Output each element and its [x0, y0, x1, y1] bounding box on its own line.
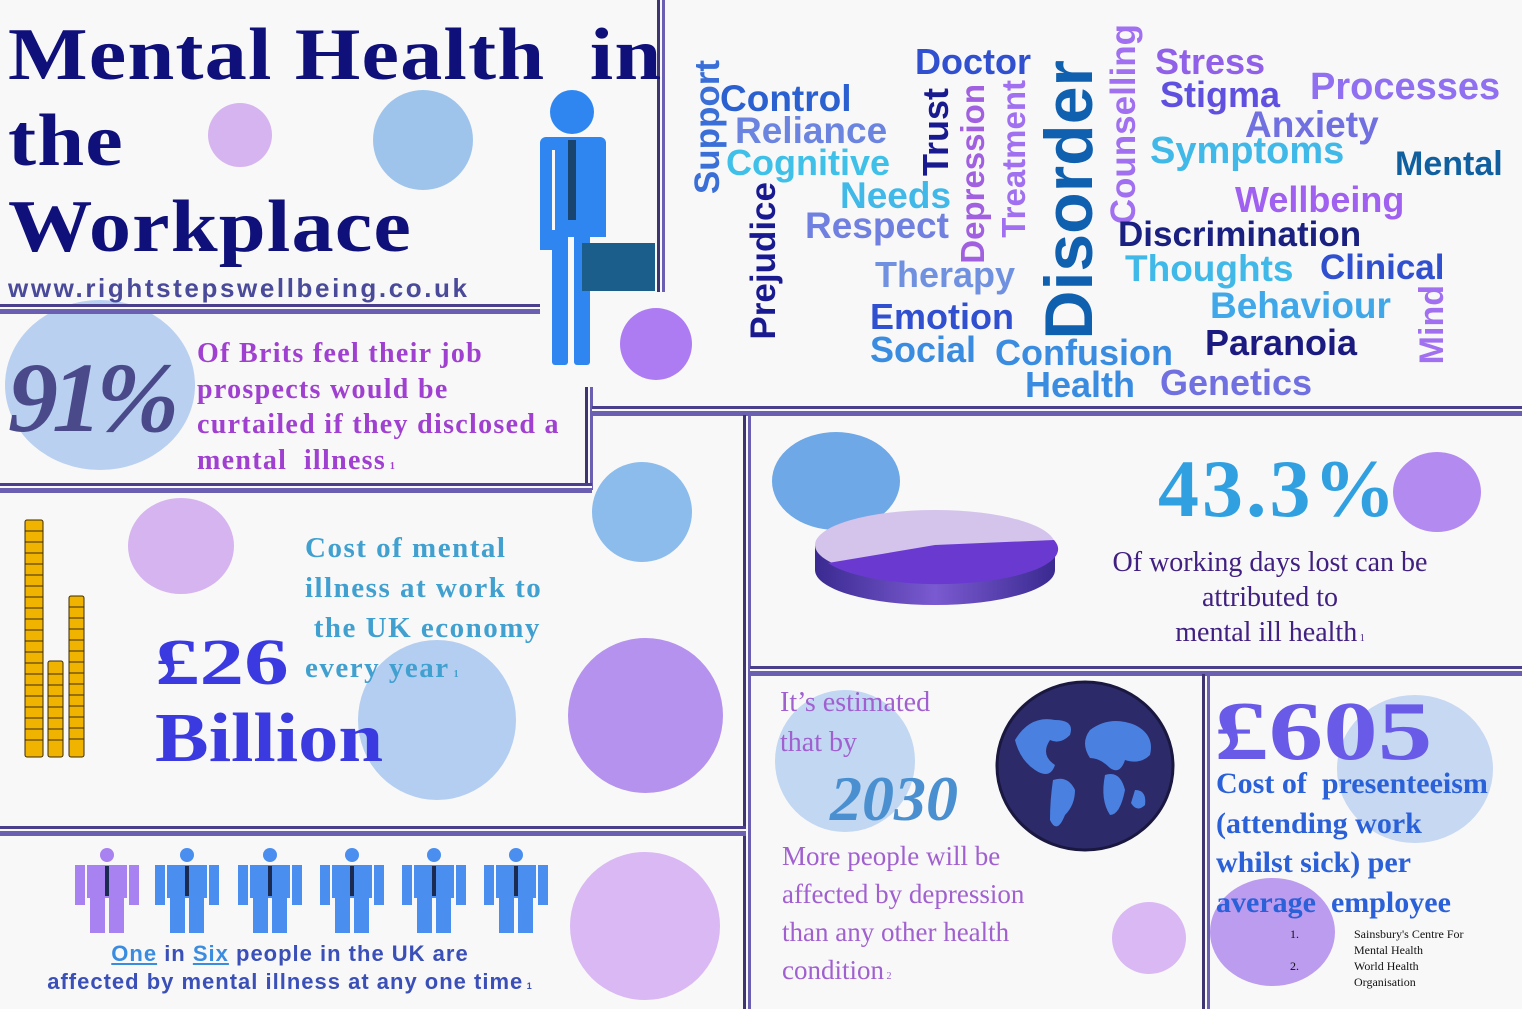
- text: working days lost: [1113, 547, 1427, 648]
- title: the: [8, 100, 124, 182]
- icon: globe: [996, 680, 1174, 852]
- word cloud: [688, 24, 1503, 405]
- text: it's estimated: that by: [780, 727, 857, 758]
- word cloud: Control: [720, 78, 852, 119]
- word cloud: Symptoms: [1150, 130, 1344, 172]
- word cloud: Wellbeing: [1235, 179, 1404, 220]
- text: depression: [782, 841, 1024, 985]
- word cloud: Treatment: [995, 80, 1032, 238]
- stat: £26 Billion: Billion: [155, 700, 383, 777]
- word cloud: Discrimination: [1118, 215, 1361, 254]
- stat: £26 Billion: £26: [155, 626, 289, 699]
- word cloud: Prejudice: [744, 182, 783, 340]
- text: presenteeism: whilst sick) per: [1216, 846, 1411, 879]
- text: depression: condition 2: [782, 955, 892, 985]
- word cloud: Thoughts: [1125, 248, 1294, 289]
- word cloud: Cognitive: [726, 142, 890, 183]
- text: depression: affected by depression: [782, 879, 1024, 909]
- word cloud: Clinical: [1320, 248, 1444, 287]
- word cloud: Confusion: [995, 332, 1173, 373]
- word cloud: Reliance: [735, 110, 887, 151]
- text: working days lost: attributed to: [1202, 582, 1338, 613]
- sources: Sainsbury's Centre For: [1354, 927, 1464, 941]
- text: one in six: affected by mental illness at any one time 1: [47, 969, 533, 994]
- word cloud: Anxiety: [1245, 104, 1379, 145]
- word cloud: Social: [870, 329, 976, 370]
- text: Brits job prospects: [197, 338, 560, 476]
- stat: £605: £605: [1214, 685, 1432, 778]
- word cloud: Health: [1025, 364, 1135, 405]
- title: Mental Health in: [8, 14, 662, 96]
- text: Brits job prospects: prospects would be: [197, 374, 449, 404]
- text: cost of mental illness: Cost of mental: [305, 532, 506, 564]
- text: Brits job prospects: mental illness 1: [197, 444, 396, 476]
- sources: World Health: [1354, 959, 1419, 973]
- text: working days lost: Of working days lost can be: [1113, 547, 1427, 578]
- text: presenteeism: Cost of presenteeism: [1216, 767, 1488, 800]
- text: presenteeism: average employee: [1216, 886, 1451, 918]
- word cloud: Genetics: [1160, 362, 1312, 403]
- sources: Organisation: [1354, 975, 1416, 989]
- word cloud: Disorder: [1031, 60, 1107, 340]
- sources: 2.: [1290, 959, 1299, 973]
- text: presenteeism: (attending work: [1216, 806, 1422, 840]
- text: depression: More people will be: [782, 841, 1000, 871]
- word cloud: Counselling: [1104, 24, 1143, 224]
- text: Brits job prospects: Of Brits feel their job: [197, 338, 483, 369]
- word cloud: Mind: [1413, 285, 1451, 364]
- word cloud: Therapy: [875, 254, 1015, 295]
- sources: 1.: [1290, 927, 1299, 941]
- word cloud: Paranoia: [1205, 322, 1357, 363]
- title: Workplace: [8, 186, 412, 268]
- word cloud: Emotion: [870, 296, 1014, 337]
- word cloud: Behaviour: [1210, 285, 1391, 326]
- word cloud: Stress: [1155, 41, 1265, 82]
- text: it's estimated: It’s estimated: [780, 687, 930, 718]
- icon row: six people: [75, 848, 548, 933]
- word cloud: Stigma: [1160, 74, 1280, 115]
- word cloud: Depression: [954, 84, 991, 264]
- website url: www.rightstepswellbeing.co.uk: [8, 273, 470, 303]
- divider lines: [657, 0, 660, 292]
- word cloud: Trust: [915, 88, 956, 176]
- text: one in six: [47, 941, 533, 994]
- stat: 2030: 2030: [830, 763, 958, 834]
- sources: [1290, 927, 1464, 989]
- chart: 3D pie: [815, 510, 1058, 605]
- text: one in six: One in Six people in the UK are: [111, 941, 469, 966]
- word cloud: Mental: [1395, 145, 1503, 183]
- word cloud: Respect: [805, 205, 949, 246]
- text: cost of mental illness: illness at work to: [305, 572, 542, 604]
- word cloud: Support: [688, 60, 727, 194]
- word cloud: Needs: [840, 175, 951, 216]
- text: cost of mental illness: the UK economy: [314, 612, 541, 644]
- chart: gold bars: [24, 520, 84, 758]
- stat: 91%: 91%: [8, 342, 173, 453]
- sources: Mental Health: [1354, 943, 1423, 957]
- stat: 43.3%: 43.3%: [1158, 443, 1398, 534]
- text: Brits job prospects: curtailed if they disclosed a: [197, 409, 560, 440]
- title: [8, 14, 662, 268]
- text: presenteeism: [1216, 767, 1488, 918]
- text: it's estimated: [780, 687, 930, 758]
- text: cost of mental illness: every year 1: [305, 652, 460, 684]
- stat: £26 Billion: [155, 626, 383, 777]
- word cloud: Doctor: [915, 41, 1031, 82]
- word cloud: Processes: [1310, 66, 1500, 108]
- text: cost of mental illness: [305, 532, 542, 684]
- text: working days lost: mental ill health 1: [1175, 617, 1365, 648]
- icon: businessman: [540, 90, 655, 365]
- text: depression: than any other health: [782, 917, 1009, 947]
